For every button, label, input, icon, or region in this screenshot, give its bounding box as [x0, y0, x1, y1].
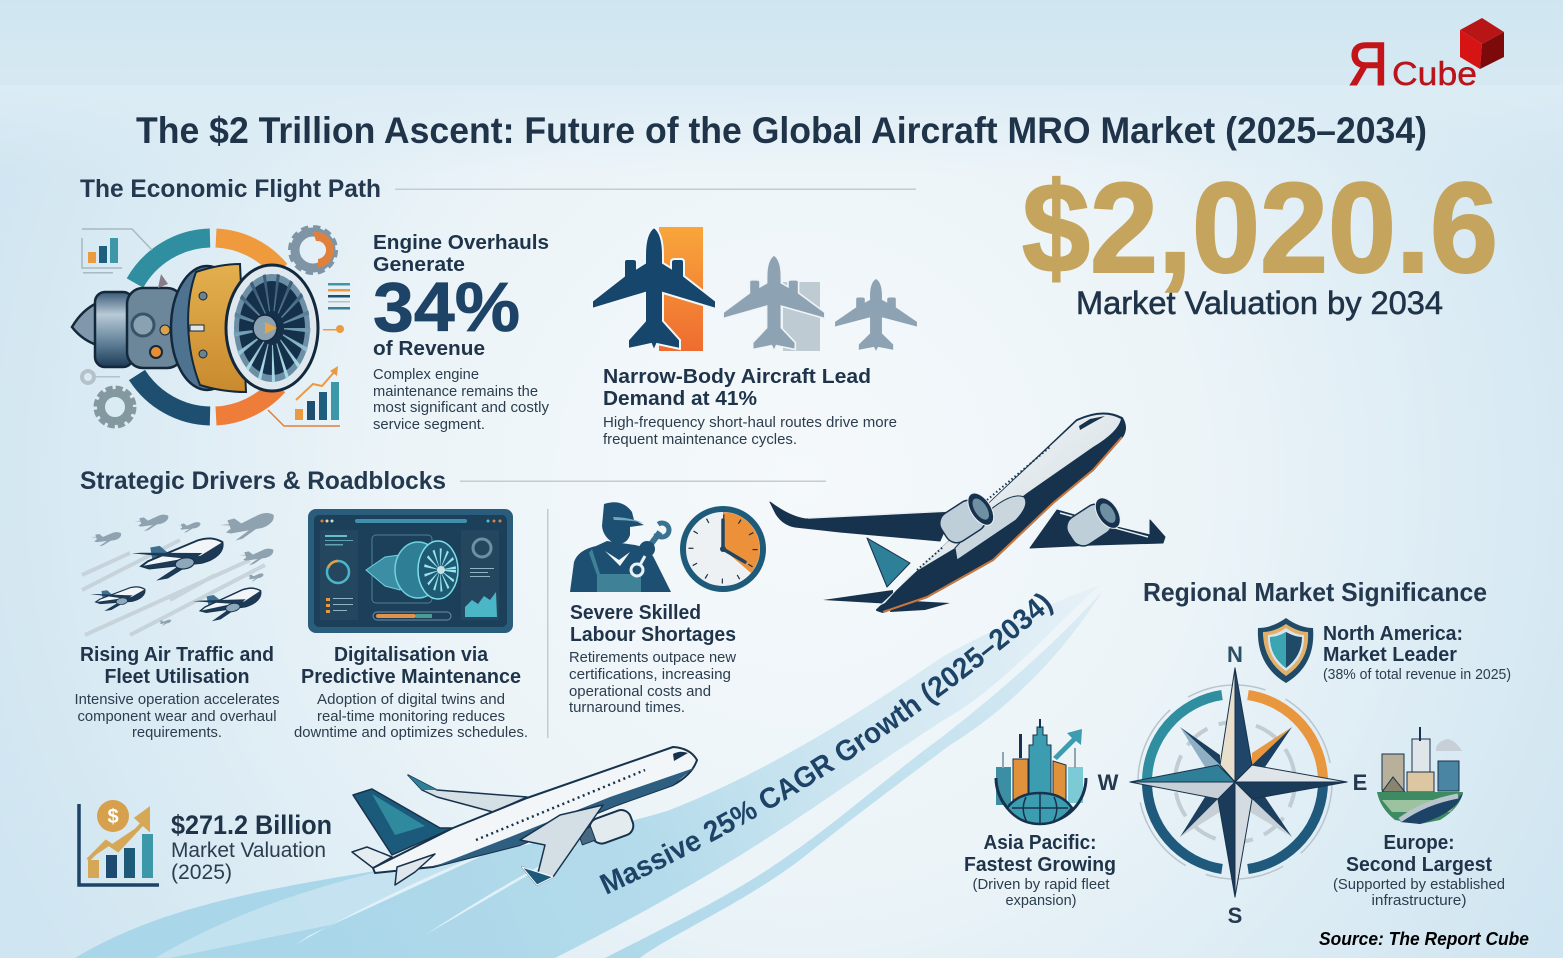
icon: Europe cityscape — [1377, 727, 1463, 824]
text: labour shortages: certifications, increasing — [569, 667, 731, 683]
growth chart — [268, 366, 340, 426]
text: narrow-body demand: frequent maintenance cycles. — [603, 432, 797, 448]
icon: growth chart with dollar coin — [79, 800, 159, 885]
text: engine overhauls: service segment. — [373, 417, 485, 433]
text: digitalisation: real-time monitoring reduces — [317, 709, 505, 725]
text: rising air traffic: requirements. — [132, 725, 222, 741]
icon: Asia Pacific skyline — [996, 719, 1086, 824]
icon: growth chart with dollar coin: $ — [107, 806, 119, 828]
text: North America — [1323, 622, 1511, 683]
gear — [82, 371, 134, 426]
text: digitalisation: Digitalisation via — [334, 643, 489, 666]
text: labour shortages: Retirements outpace new — [569, 650, 737, 666]
text: Asia Pacific — [964, 831, 1116, 909]
section heading: Strategic Drivers & Roadblocks: Strategic Drivers & Roadblocks — [80, 467, 446, 495]
illustration: large climbing aircraft — [770, 413, 1165, 612]
text: labour shortages: turnaround times. — [569, 700, 685, 716]
text: Europe: (Supported by established — [1333, 877, 1505, 893]
divider — [547, 509, 548, 738]
heading: Regional Market Significance: Regional Market Significance — [1143, 577, 1487, 607]
text: Asia Pacific: Fastest Growing — [964, 853, 1116, 876]
text: Europe: Second Largest — [1346, 853, 1492, 876]
gear — [291, 228, 335, 272]
logo: RCube: Cube — [1392, 55, 1477, 92]
text: North America: Market Leader — [1323, 643, 1457, 666]
text: labour shortages: Labour Shortages — [570, 623, 736, 646]
text: rising air traffic: component wear and overhaul — [78, 709, 276, 725]
icon: mechanic — [570, 502, 672, 592]
icon: narrow-body aircraft comparison — [592, 227, 917, 351]
source note: Source: The Report Cube — [1319, 929, 1529, 949]
stat: 2025 market valuation: (2025) — [171, 861, 232, 884]
text: North America: North America: — [1323, 622, 1463, 645]
illustration: lower aircraft — [352, 747, 697, 885]
compass labels: E — [1353, 770, 1367, 795]
growth swoosh — [75, 585, 1103, 958]
compass labels: W — [1098, 770, 1119, 795]
icon: fleet of aircraft — [82, 509, 277, 635]
text: digitalisation: downtime and optimizes schedules. — [294, 725, 528, 741]
logo: RCube — [1348, 18, 1504, 98]
stat: 2025 market valuation: Market Valuation — [171, 839, 326, 862]
curved label: CAGR growth: Massive 25% CAGR Growth (2025–2034) — [599, 593, 1054, 894]
compass labels: S — [1228, 903, 1242, 928]
stat: 2025 market valuation: $271.2 Billion — [171, 810, 332, 840]
text: engine overhauls: most significant and costly — [373, 400, 550, 416]
text: narrow-body demand — [603, 365, 897, 448]
text: rising air traffic: Rising Air Traffic and — [80, 643, 274, 666]
text: Europe: infrastructure) — [1372, 893, 1466, 909]
compass labels — [1098, 642, 1367, 928]
text: engine overhauls — [373, 231, 550, 433]
text: engine overhauls: Generate — [373, 253, 465, 276]
legend lines — [323, 283, 350, 333]
mini chart — [82, 229, 152, 274]
text: Europe: Europe: — [1384, 831, 1454, 854]
text: rising air traffic: Intensive operation accelerates — [74, 692, 280, 708]
text: Europe — [1333, 831, 1505, 909]
text: digitalisation — [294, 643, 528, 741]
section heading: The Economic Flight Path: The Economic Flight Path — [80, 175, 381, 203]
text: digitalisation: Adoption of digital twins and — [317, 692, 505, 708]
text: engine overhauls: Engine Overhauls — [373, 231, 549, 254]
text: digitalisation: Predictive Maintenance — [301, 665, 521, 688]
stat: 2025 market valuation — [79, 800, 332, 885]
icon: shield — [1258, 618, 1313, 683]
text: narrow-body demand: High-frequency short-haul routes drive more — [603, 415, 897, 431]
text: labour shortages — [569, 601, 737, 716]
compass labels: N — [1227, 642, 1243, 667]
text: engine overhauls: 34% — [373, 268, 520, 346]
big stat: 2034 market valuation: $2,020.6 — [1022, 157, 1498, 300]
text: North America: (38% of total revenue in 2025) — [1323, 667, 1511, 683]
big stat: 2034 market valuation: Market Valuation by 2034 — [1076, 285, 1443, 321]
text: Asia Pacific: (Driven by rapid fleet — [972, 877, 1110, 893]
title: The $2 Trillion Ascent: Future of the Global Aircraft MRO Market (2025–2034) — [136, 110, 1427, 151]
text: narrow-body demand: Narrow-Body Aircraft Lead — [603, 365, 871, 388]
text: engine overhauls: maintenance remains the — [373, 384, 538, 400]
text: Asia Pacific: expansion) — [1006, 893, 1076, 909]
text: engine overhauls: Complex engine — [373, 367, 479, 383]
icon: compass rose — [1130, 668, 1347, 897]
text: rising air traffic: Fleet Utilisation — [104, 665, 250, 688]
text: labour shortages: operational costs and — [569, 684, 711, 700]
icon: predictive maintenance tablet — [308, 509, 513, 633]
text: narrow-body demand: Demand at 41% — [603, 387, 757, 410]
text: engine overhauls: of Revenue — [373, 337, 485, 360]
icon: clock — [683, 509, 763, 589]
text: rising air traffic — [74, 643, 280, 741]
logo: RCube: Я — [1348, 31, 1388, 98]
text: labour shortages: Severe Skilled — [570, 601, 701, 624]
text: Asia Pacific: Asia Pacific: — [984, 831, 1096, 854]
icon: jet engine infographic — [72, 228, 350, 426]
